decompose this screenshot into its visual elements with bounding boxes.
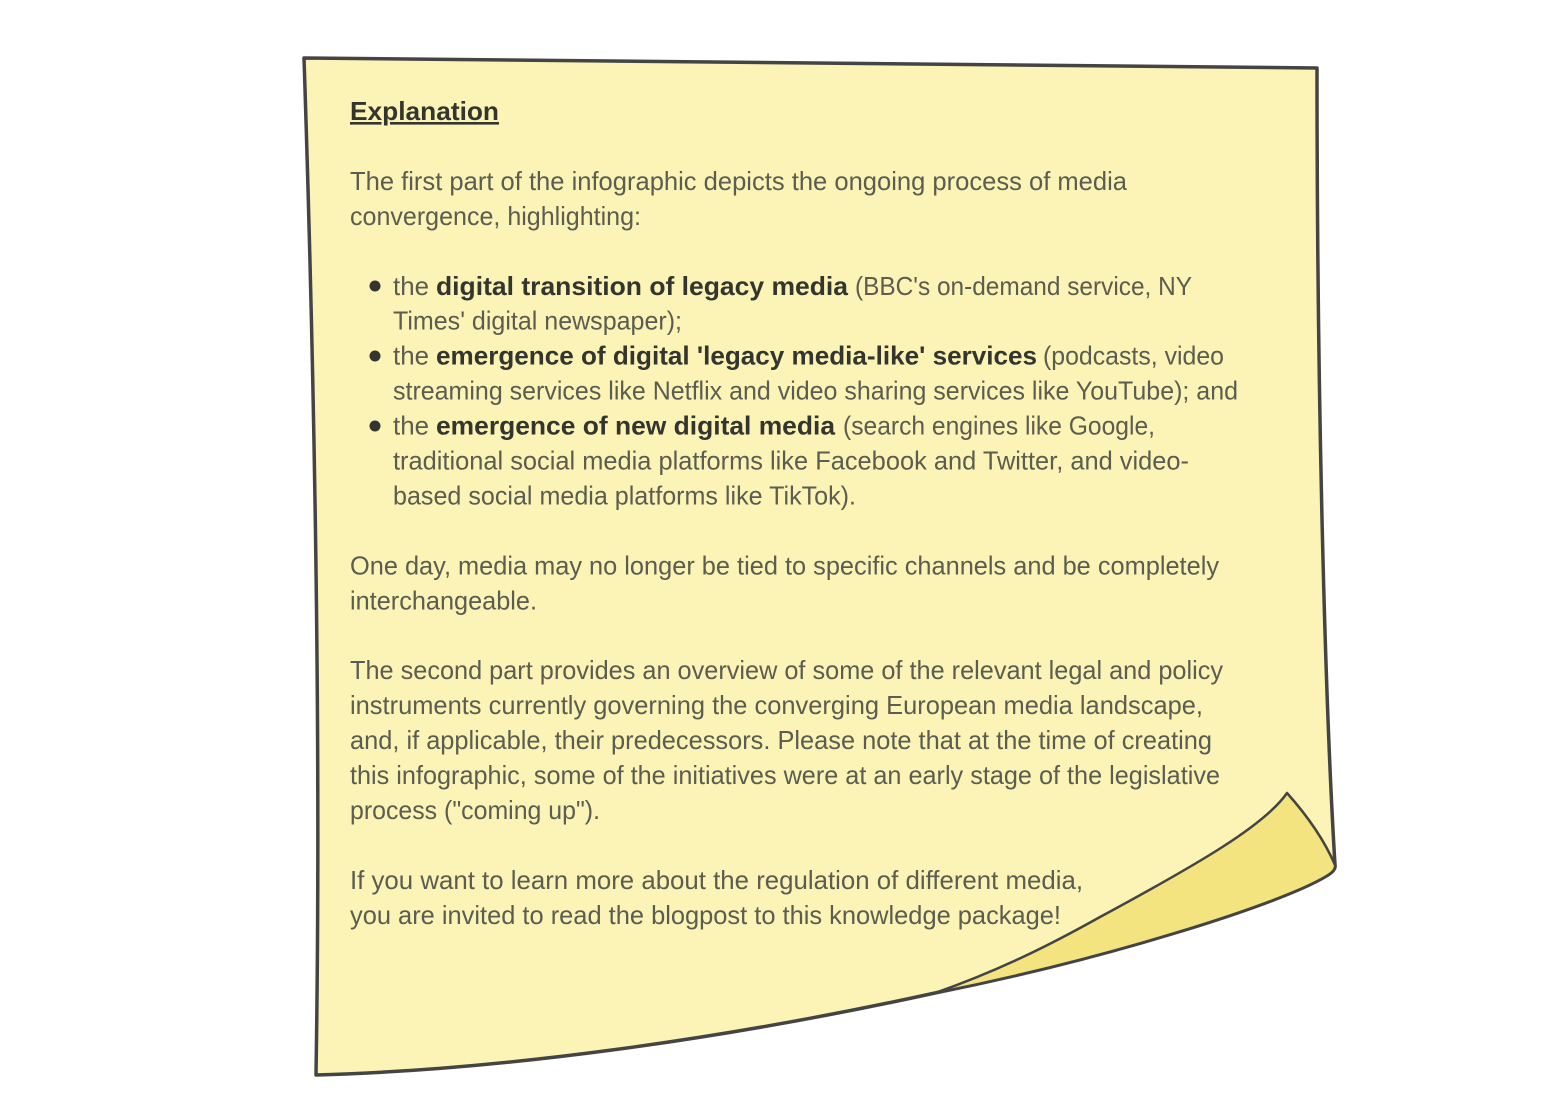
bullet 3: emergence of new digital media: based social media platforms like TikTok). (393, 480, 856, 510)
paragraph: legal and policy instruments: The second part provides an overview of some of the relevant legal and policy (350, 655, 1223, 685)
sticky note paper (304, 58, 1335, 1075)
bullet 3: emergence of new digital media (370, 410, 1189, 510)
bullet 3: emergence of new digital media: emergence of new digital media (436, 410, 836, 440)
bullet 2: emergence of legacy media-like services: emergence of digital 'legacy media-like' services (436, 340, 1037, 370)
bullet 2: emergence of legacy media-like services: streaming services like Netflix and video sharing services like YouTube); and (393, 376, 1238, 406)
bullet 1: digital transition of legacy media: (BBC's on-demand service, NY (855, 271, 1192, 301)
paragraph: legal and policy instruments: process ("coming up"). (350, 795, 600, 825)
heading: Explanation (350, 96, 499, 126)
paragraph: interchangeable media: One day, media may no longer be tied to specific channels and be completely (350, 550, 1219, 580)
bullet 3: emergence of new digital media: traditional social media platforms like Facebook and Twitter, and video- (393, 446, 1189, 476)
bullet 3: emergence of new digital media: the (393, 410, 429, 440)
paragraph: blogpost invitation: If you want to learn more about the regulation of different media, (350, 865, 1083, 895)
bullet 1: digital transition of legacy media: digital transition of legacy media (436, 271, 849, 301)
bullet 3: emergence of new digital media: (search engines like Google, (843, 410, 1155, 440)
intro paragraph: The first part of the infographic depicts the ongoing process of media (350, 166, 1128, 196)
bullet list (370, 271, 1238, 510)
bullet 2: emergence of legacy media-like services (370, 340, 1238, 406)
bullet 1: digital transition of legacy media: the (393, 271, 429, 301)
bullet 1: digital transition of legacy media: Times' digital newspaper); (393, 306, 682, 336)
paragraph: legal and policy instruments (350, 655, 1223, 825)
paragraph: blogpost invitation: you are invited to read the blogpost to this knowledge package! (350, 900, 1061, 930)
paragraph: legal and policy instruments: and, if applicable, their predecessors. Please note that at the time of creating (350, 725, 1212, 755)
paragraph: legal and policy instruments: this infographic, some of the initiatives were at an early stage of the legislative (350, 760, 1220, 790)
paragraph: interchangeable media: interchangeable. (350, 586, 537, 616)
intro paragraph (350, 166, 1128, 231)
curled corner fold (935, 793, 1335, 993)
paragraph: legal and policy instruments: instruments currently governing the converging European media landscape, (350, 690, 1203, 720)
bullet 2: emergence of legacy media-like services: (podcasts, video (1043, 340, 1224, 370)
intro paragraph: convergence, highlighting: (350, 201, 641, 231)
bullet 2: emergence of legacy media-like services: the (393, 340, 429, 370)
paragraph: interchangeable media (350, 550, 1219, 616)
bullet 1: digital transition of legacy media (370, 271, 1192, 336)
paragraph: blogpost invitation (350, 865, 1083, 930)
